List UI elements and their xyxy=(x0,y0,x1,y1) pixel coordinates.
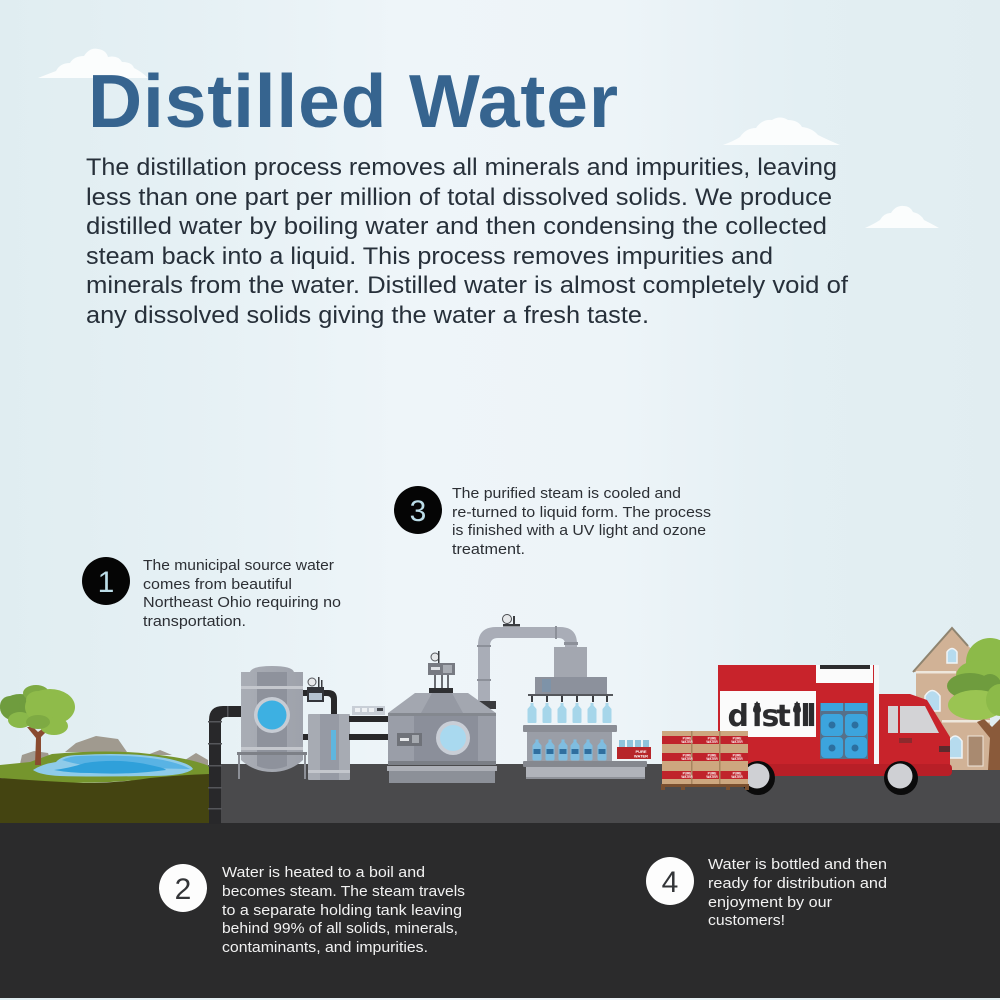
control panel xyxy=(397,733,422,746)
intro paragraph xyxy=(86,154,848,329)
grass hill xyxy=(0,752,209,783)
step 1 badge xyxy=(82,557,130,605)
window with bottles xyxy=(820,703,868,759)
pond landscape xyxy=(0,685,209,823)
step 3 text: treatment. xyxy=(452,542,525,558)
pallet of water xyxy=(661,731,749,790)
pallet labels: WATER xyxy=(731,757,743,761)
title: Distilled Water xyxy=(88,59,618,143)
pallet labels: WATER xyxy=(731,775,743,779)
step 4 badge: 4 xyxy=(662,866,678,899)
boiler xyxy=(387,651,497,783)
step 1 text: The municipal source water xyxy=(143,558,334,574)
distill logo: distill xyxy=(728,699,817,734)
pond xyxy=(33,754,193,776)
red bottle case: PURE xyxy=(635,749,647,754)
step 4 text: Water is bottled and then xyxy=(708,857,887,873)
nozzles xyxy=(531,696,608,702)
step 4 badge xyxy=(646,857,694,905)
step 2 text xyxy=(222,865,465,956)
step 3 text xyxy=(452,486,711,558)
step 2 text: to a separate holding tank leaving xyxy=(222,903,462,919)
dark footer panel xyxy=(0,823,1000,998)
top device xyxy=(429,688,453,693)
intro paragraph: less than one part per million of total dissolved solids. We produce xyxy=(86,184,832,211)
step 3 badge xyxy=(394,486,442,534)
intro paragraph: distilled water by boiling water and then condensing the collected xyxy=(86,213,827,240)
tree xyxy=(0,685,75,765)
cargo box xyxy=(718,665,874,770)
white sign xyxy=(720,691,816,737)
road xyxy=(209,764,1000,824)
tank window xyxy=(254,697,290,733)
cloud: top right xyxy=(723,118,840,145)
step 1 text: comes from beautiful xyxy=(143,577,292,593)
pallet labels: WATER xyxy=(681,775,693,779)
step 1 badge: 1 xyxy=(98,566,114,599)
porthole xyxy=(436,721,470,755)
pallet labels: WATER xyxy=(706,757,718,761)
pallet labels: WATER xyxy=(681,740,693,744)
step 2 text: behind 99% of all solids, minerals, xyxy=(222,921,458,937)
house xyxy=(913,628,992,770)
intro paragraph: steam back into a liquid. This process removes impurities and xyxy=(86,243,773,270)
step 1 text: transportation. xyxy=(143,614,246,630)
pallet labels: WATER xyxy=(731,740,743,744)
pallet labels: PURE xyxy=(708,754,716,758)
table legs xyxy=(238,755,306,779)
step 2 badge: 2 xyxy=(175,873,191,906)
pallet labels: WATER xyxy=(706,775,718,779)
hopper xyxy=(554,647,587,677)
hanging bottles xyxy=(528,703,612,723)
pallet labels: WATER xyxy=(706,740,718,744)
delivery truck xyxy=(718,665,952,795)
base xyxy=(387,766,497,771)
roof xyxy=(388,693,496,716)
pipe gauge xyxy=(502,614,512,624)
intro paragraph: minerals from the water. Distilled water is almost completely void of xyxy=(86,272,848,299)
control unit and pipes xyxy=(349,706,388,740)
conveyor xyxy=(523,761,647,767)
level tube xyxy=(331,730,336,760)
pallet labels: PURE xyxy=(683,754,691,758)
right tree xyxy=(947,638,1000,770)
boiling tank xyxy=(237,666,307,779)
red bottle case xyxy=(617,740,651,759)
step 2 text: becomes steam. The steam travels xyxy=(222,884,465,900)
cab xyxy=(879,694,950,765)
pallet labels: PURE xyxy=(683,772,691,776)
gauge device xyxy=(307,687,324,702)
step 1 text xyxy=(143,558,341,630)
machine frame xyxy=(527,732,612,761)
pallet labels: PURE xyxy=(733,772,741,776)
body xyxy=(388,714,496,764)
cab windows xyxy=(900,706,939,733)
step 2 text: contaminants, and impurities. xyxy=(222,940,428,956)
front wheel xyxy=(884,761,918,795)
rocks xyxy=(20,736,208,766)
soil xyxy=(0,774,209,823)
upper white sign xyxy=(816,665,873,683)
cloud: top left xyxy=(38,49,148,78)
step 1 text: Northeast Ohio requiring no xyxy=(143,595,341,611)
steam pipe xyxy=(477,614,578,709)
pallet labels: PURE xyxy=(683,736,691,740)
pallet labels xyxy=(681,736,743,779)
step 4 text: enjoyment by our xyxy=(708,895,832,911)
step 2 badge xyxy=(159,864,207,912)
house windows xyxy=(925,648,962,758)
bumper strip xyxy=(747,764,952,776)
pallet labels: PURE xyxy=(708,736,716,740)
step 3 badge: 3 xyxy=(410,495,426,528)
pallet labels: PURE xyxy=(708,772,716,776)
intro paragraph: any dissolved solids giving the water a fresh taste. xyxy=(86,302,649,329)
bottling machine xyxy=(523,647,647,779)
pallet labels: WATER xyxy=(681,757,693,761)
rear wheel xyxy=(741,761,775,795)
step 3 text: is finished with a UV light and ozone xyxy=(452,523,706,539)
step 4 text: ready for distribution and xyxy=(708,876,887,892)
step 4 text: customers! xyxy=(708,913,785,929)
connecting pipe xyxy=(303,690,337,714)
door xyxy=(968,736,983,766)
step 3 text: re-turned to liquid form. The process xyxy=(452,505,711,521)
pallet base xyxy=(661,784,749,790)
step 4 text xyxy=(708,857,887,929)
tank body xyxy=(241,666,303,772)
step 2 text: Water is heated to a boil and xyxy=(222,865,425,881)
pallet labels: PURE xyxy=(733,736,741,740)
cloud: small right xyxy=(865,206,939,228)
pipe from pond to tank xyxy=(208,706,241,824)
intro paragraph: The distillation process removes all minerals and impurities, leaving xyxy=(86,154,837,181)
filled bottles xyxy=(532,740,606,760)
holding tank with pipe and gauge xyxy=(303,677,350,780)
red bottle case: WATER xyxy=(634,754,648,758)
pallet labels: PURE xyxy=(733,754,741,758)
tank box xyxy=(308,714,350,780)
gap xyxy=(874,665,879,764)
step 3 text: The purified steam is cooled and xyxy=(452,486,681,502)
